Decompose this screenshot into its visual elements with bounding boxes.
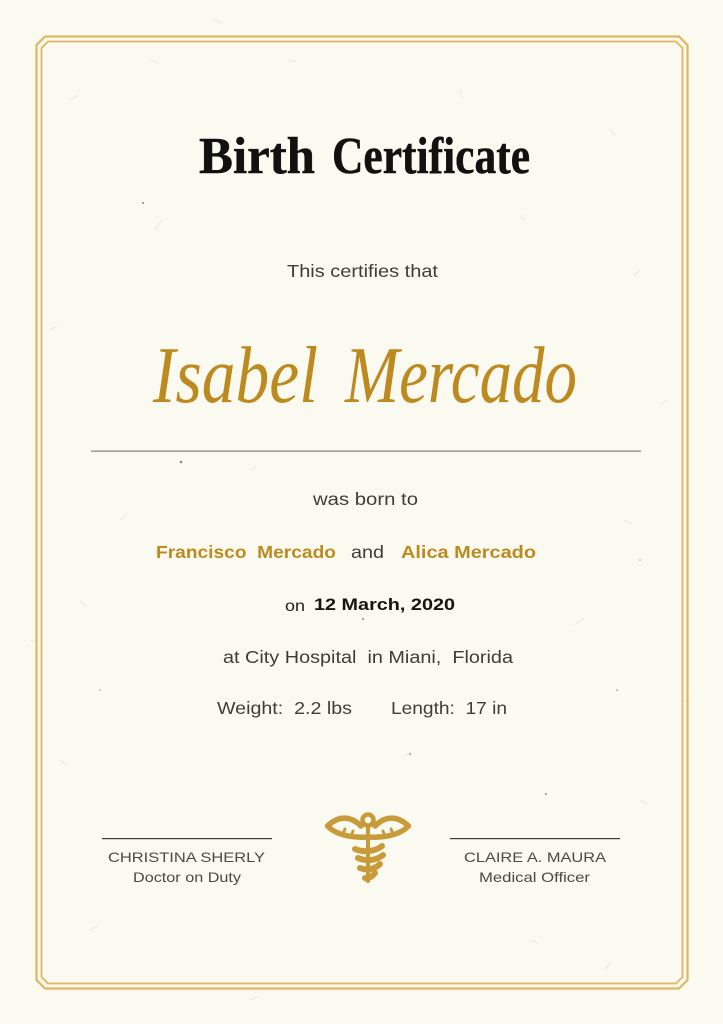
signature: doctor (102, 838, 272, 885)
parents: Alica Mercado (401, 542, 536, 562)
signature: medical officer: CLAIRE A. MAURA (464, 849, 607, 865)
birth date: on (285, 598, 305, 615)
measurements: Weight: 2.2 lbs (217, 698, 352, 718)
signature: doctor: CHRISTINA SHERLY (108, 849, 266, 865)
birth place: at City Hospital in Miani, Florida (223, 647, 513, 667)
recipient name (152, 332, 577, 420)
title: Birth (199, 128, 315, 185)
recipient name: Isabel (152, 332, 318, 420)
icon: caduceus (328, 814, 408, 881)
born to line: was born to (312, 489, 418, 509)
signature: medical officer: Medical Officer (479, 869, 590, 885)
measurements (217, 698, 507, 718)
birth date: 12 March, 2020 (314, 595, 455, 614)
title (199, 128, 530, 185)
recipient name: Mercado (344, 332, 577, 420)
measurements: Length: 17 in (391, 698, 507, 718)
parents (156, 542, 536, 562)
parents: and (351, 542, 384, 562)
parents: Francisco Mercado (156, 542, 336, 562)
birth date (285, 595, 455, 615)
signature: doctor: Doctor on Duty (133, 869, 241, 885)
signature: medical officer (450, 838, 620, 885)
intro line: This certifies that (287, 261, 438, 281)
divider (91, 450, 641, 452)
title: Certificate (332, 128, 530, 185)
